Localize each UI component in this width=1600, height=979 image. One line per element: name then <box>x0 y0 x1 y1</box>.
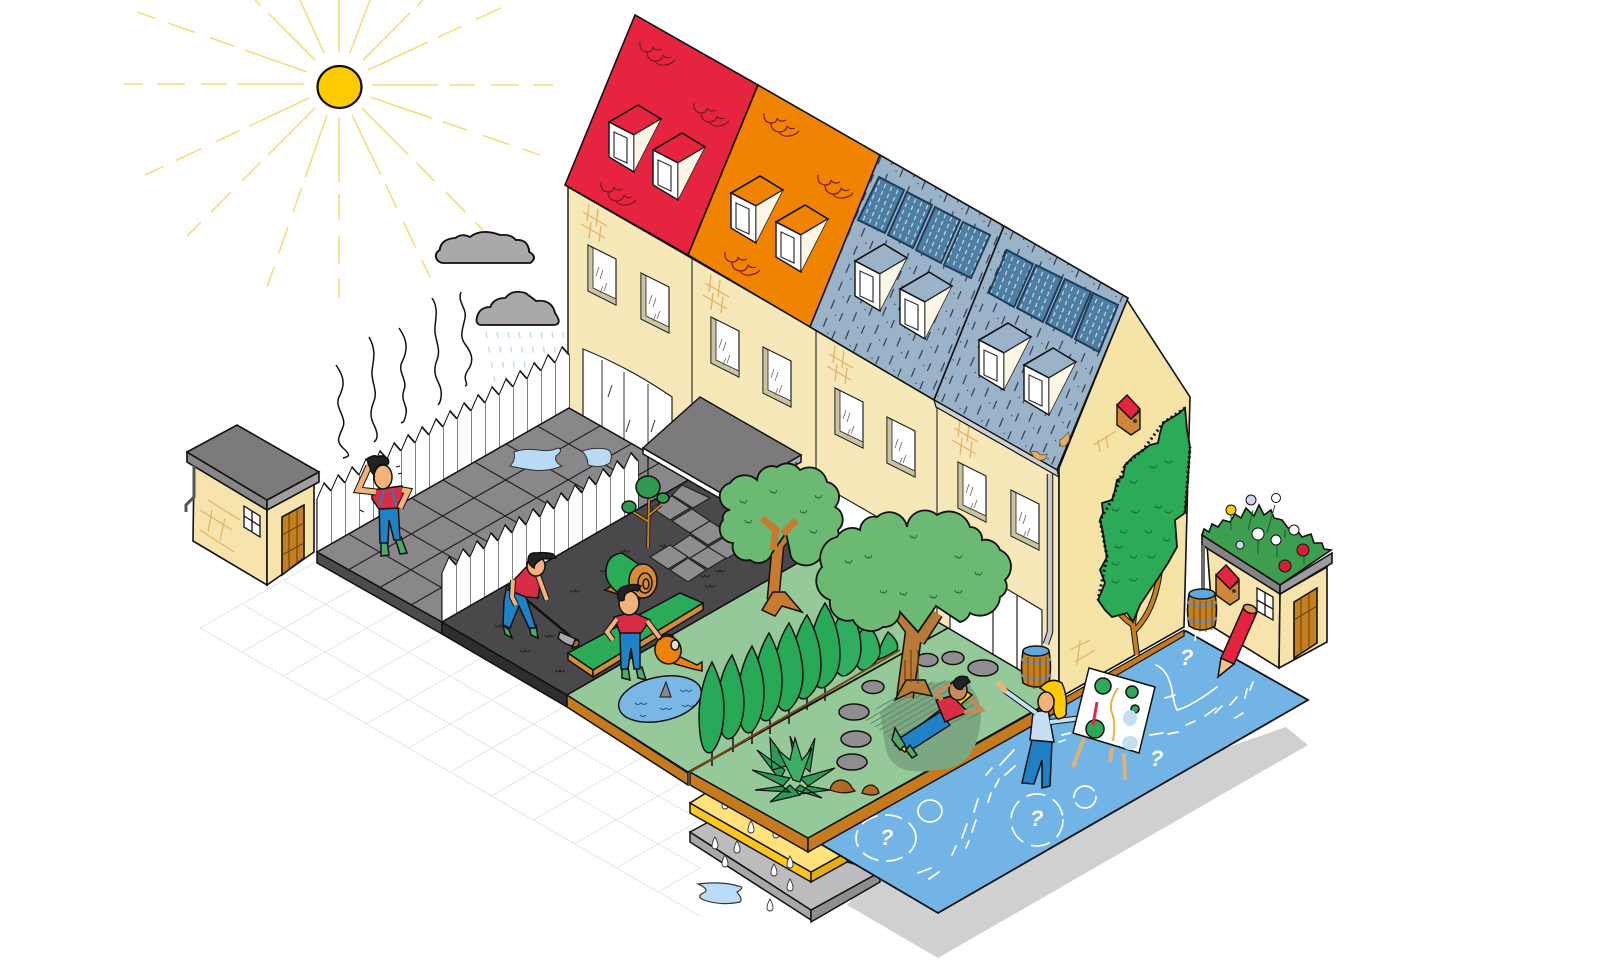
water drops <box>712 797 793 911</box>
paving plot <box>317 408 692 634</box>
brown edge along gable <box>1064 630 1184 706</box>
heat wave lines <box>336 292 472 458</box>
shade under tree <box>865 680 981 772</box>
roof tile marks <box>601 42 853 275</box>
stepping stones <box>837 652 998 770</box>
turf roll <box>605 553 657 600</box>
person relaxing on deck chair <box>892 676 982 758</box>
green lawn plot left <box>567 552 948 785</box>
roof slate 1 <box>810 155 1004 400</box>
turf strip <box>568 593 703 677</box>
gardener watering <box>607 584 660 680</box>
roof red <box>565 15 758 255</box>
brick marks <box>581 204 1116 665</box>
puddle on floor <box>698 883 742 904</box>
green roof meadow <box>1202 505 1331 585</box>
solar panels right <box>989 250 1118 352</box>
solar panels left <box>858 177 990 278</box>
yellow drainage layer <box>690 793 847 882</box>
gardener digging <box>503 553 579 648</box>
climbing tree on gable <box>1098 408 1190 655</box>
glass doors third house <box>827 488 900 600</box>
rain barrel centre <box>1021 646 1051 689</box>
easel with plan <box>1073 668 1155 780</box>
roof flowers <box>1226 494 1309 572</box>
birds on roof <box>1031 432 1069 460</box>
puddles on paving <box>510 448 562 470</box>
stacked paving slabs <box>650 485 746 582</box>
gutter <box>934 400 1059 477</box>
birdhouse on gable <box>1117 395 1140 435</box>
front fence <box>442 449 638 623</box>
woman planning <box>998 680 1094 788</box>
terraced house <box>565 15 1190 698</box>
glass door dividers <box>602 360 655 460</box>
front walls <box>568 187 1059 693</box>
glass doors fourth house <box>950 555 1042 683</box>
garden pond <box>614 669 706 729</box>
shed left <box>186 425 319 585</box>
roof slate 2 <box>934 226 1128 470</box>
cloud lower with rain <box>477 292 567 440</box>
drain pipe <box>1046 474 1050 644</box>
sun with rays <box>124 0 553 298</box>
blue plan sheet: ? <box>1150 746 1163 771</box>
roof orange <box>688 85 880 327</box>
tree large <box>816 510 1011 700</box>
small sapling <box>622 476 669 548</box>
rain barrel right <box>1187 589 1217 632</box>
side birdhouse on shed <box>1216 565 1239 605</box>
watering can <box>651 632 702 671</box>
gardener stressed <box>358 456 408 556</box>
giant red pencil <box>1218 603 1258 677</box>
shed right with green roof <box>1202 494 1332 668</box>
blue plan sheet: ? <box>1180 645 1193 670</box>
awning <box>643 397 801 540</box>
dormers <box>609 105 1076 415</box>
blue plan sheet: ? <box>1030 806 1043 831</box>
blue plan sheet: ? <box>880 825 893 850</box>
dark soil plot <box>442 478 817 707</box>
floor grid <box>200 508 700 916</box>
hedgehogs <box>830 780 879 795</box>
ground shadow under plot <box>847 727 1308 958</box>
gable side wall <box>1059 300 1190 698</box>
back fence <box>317 343 569 552</box>
grey base layer <box>690 820 880 922</box>
green lawn plot right <box>690 628 1064 852</box>
windows <box>588 245 1039 550</box>
agave plant <box>752 736 835 802</box>
blue plan sheet <box>819 631 1308 913</box>
glass doors ground floor <box>583 349 672 470</box>
tree centre <box>720 463 843 616</box>
cypress hedge <box>690 603 900 772</box>
cloud upper <box>436 232 534 263</box>
